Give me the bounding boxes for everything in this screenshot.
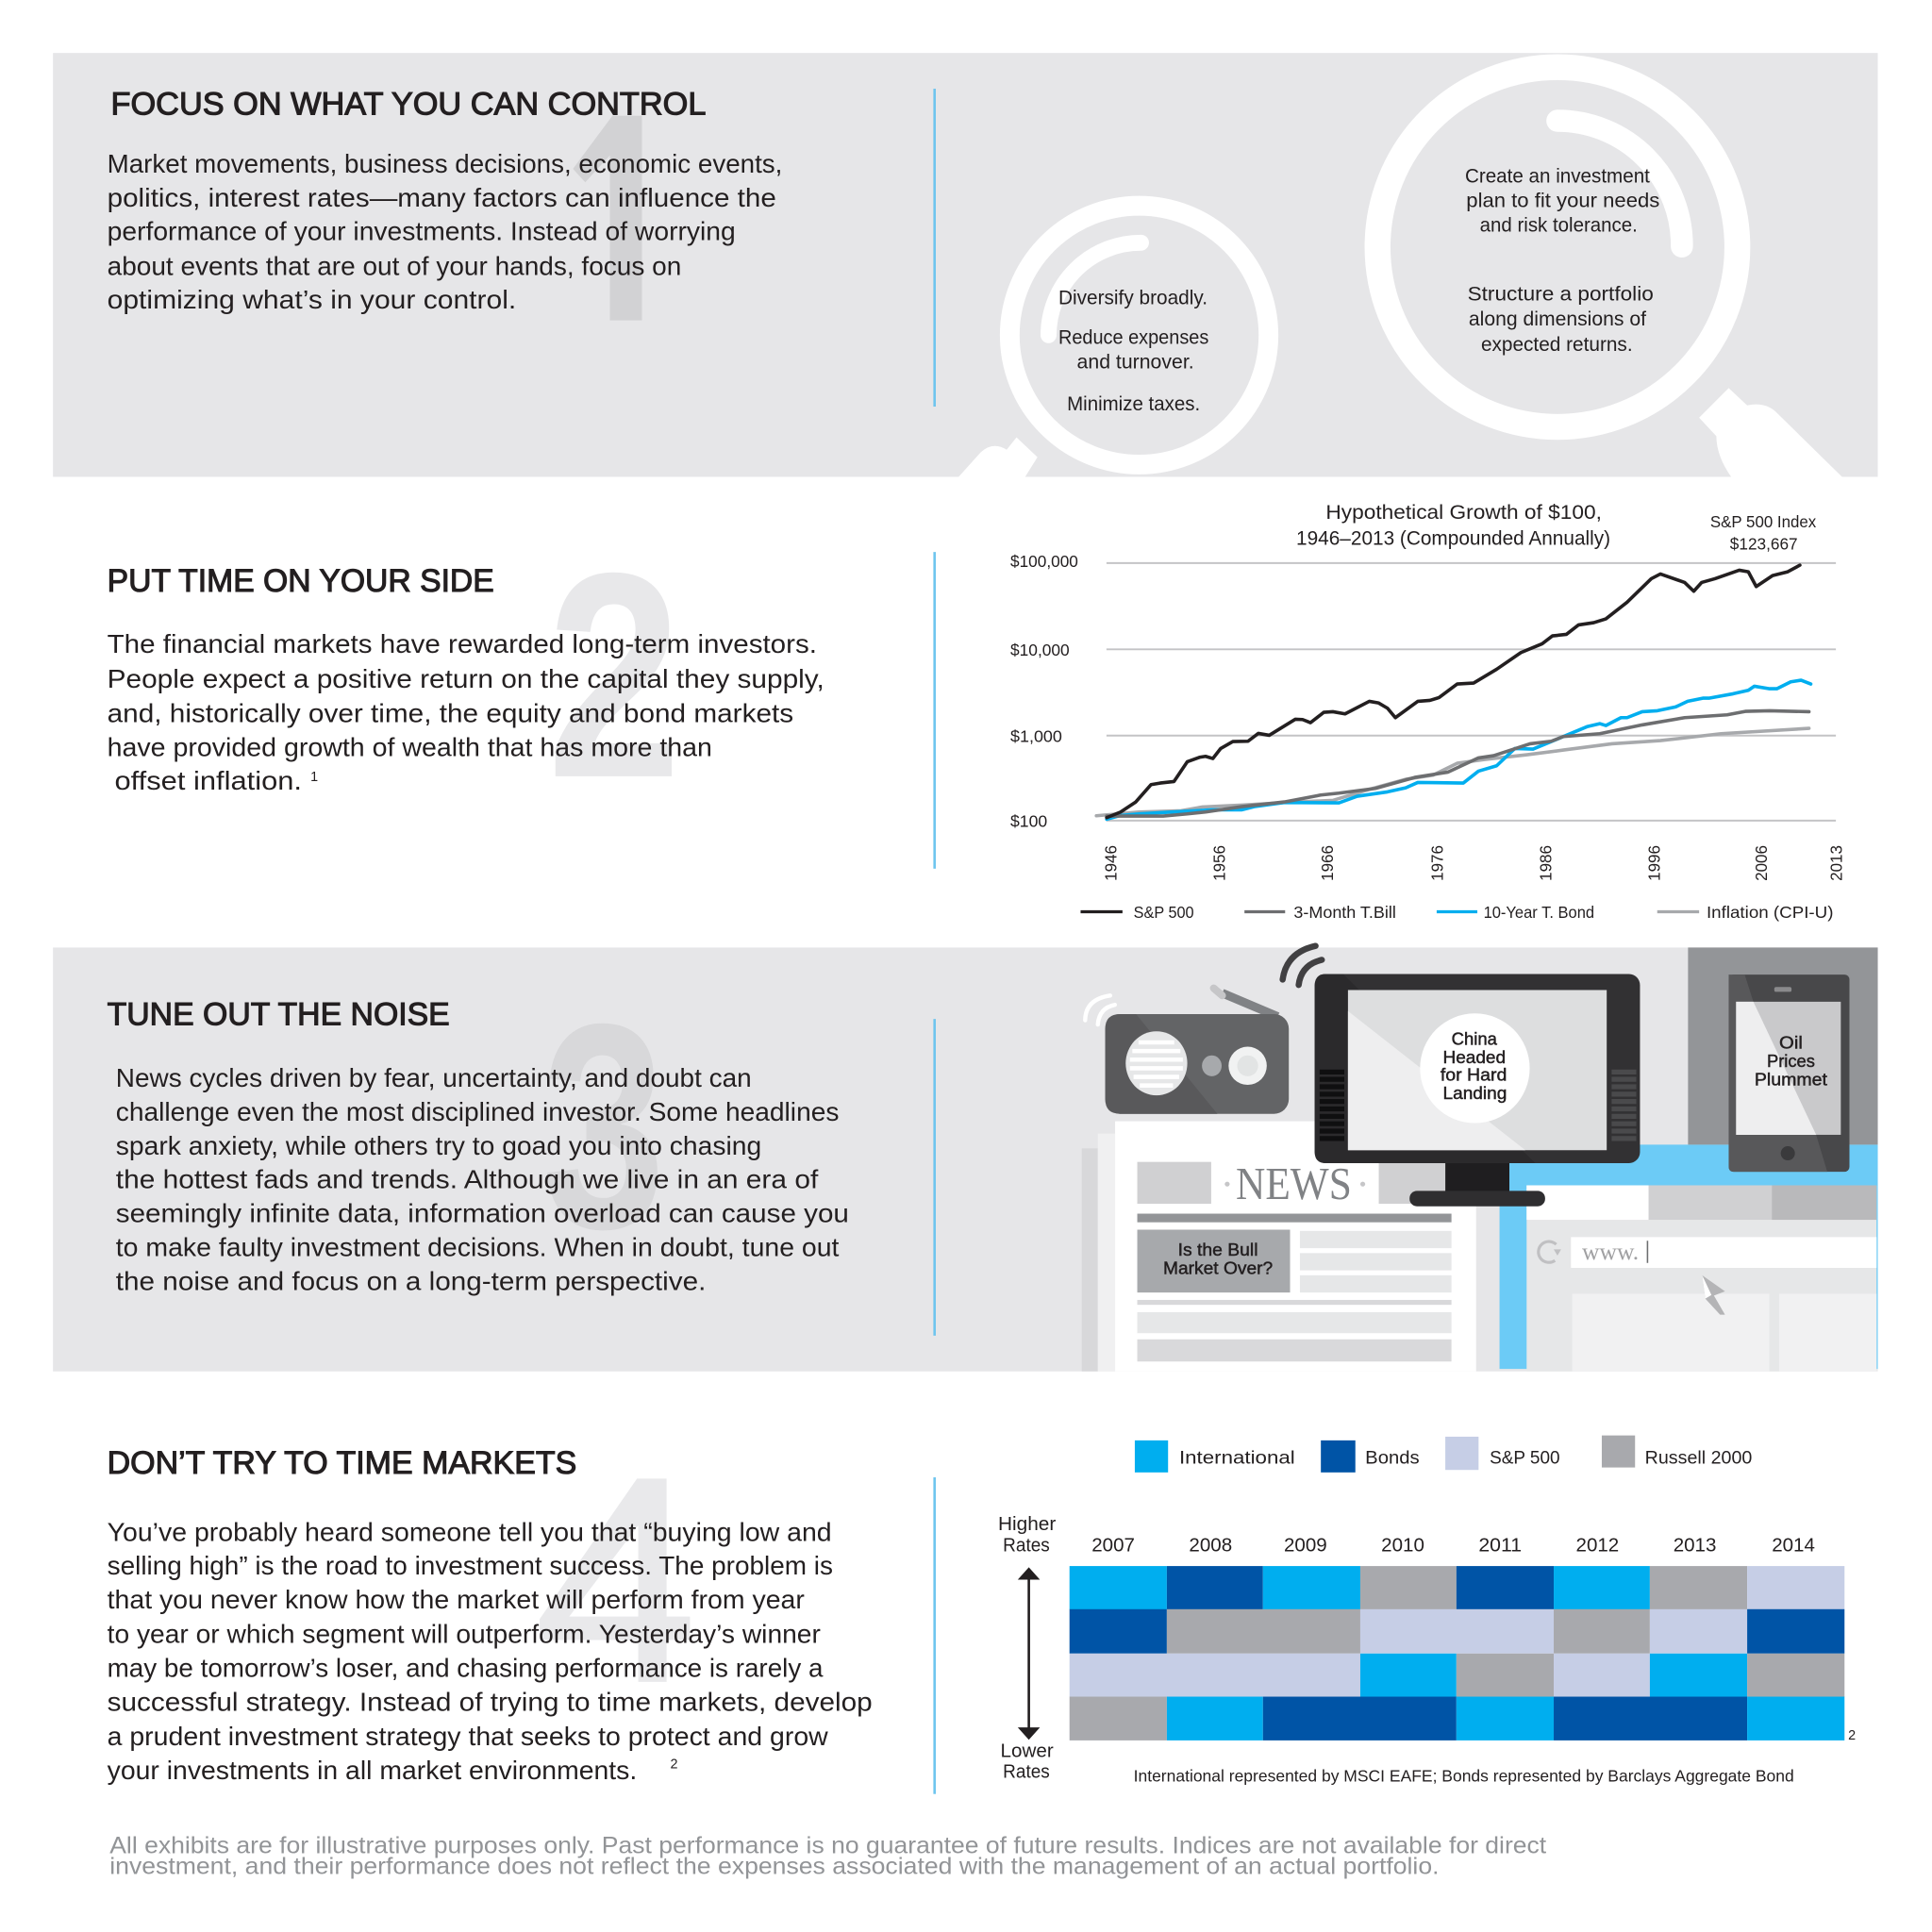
heading: PUT TIME ON YOUR SIDE <box>108 563 494 599</box>
year headers: 2010 <box>1381 1535 1424 1556</box>
body text: a prudent investment strategy that seeks to protect and grow <box>108 1722 828 1751</box>
illustration: radio <box>1085 989 1289 1114</box>
heat map legend <box>1135 1436 1752 1473</box>
text: large lens tips: plan to fit your needs <box>1466 190 1659 211</box>
body text: News cycles driven by fear, uncertainty, and doubt can <box>116 1063 752 1092</box>
axis labels and arrow: Rates <box>1003 1535 1050 1556</box>
heading: DON’T TRY TO TIME MARKETS <box>108 1445 576 1481</box>
year headers: 2008 <box>1189 1535 1232 1556</box>
body text: and, historically over time, the equity and bond markets <box>108 698 793 727</box>
body text: offset inflation. <box>114 766 302 795</box>
heat map legend: Russell 2000 <box>1645 1448 1752 1469</box>
body text: the noise and focus on a long-term perspective. <box>116 1267 706 1296</box>
body text: that you never know how the market will perform from year <box>108 1585 805 1614</box>
body text: to make faulty investment decisions. When in doubt, tune out <box>116 1233 840 1262</box>
y axis labels: $100 <box>1010 811 1047 830</box>
divider <box>933 89 936 407</box>
body text: The financial markets have rewarded long-term investors. <box>108 629 817 658</box>
body text: have provided growth of wealth that has more than <box>108 732 712 761</box>
tv headline: Landing <box>1442 1083 1507 1103</box>
chart legend: S&P 500 <box>1134 903 1194 922</box>
body text: spark anxiety, while others try to goad you into chasing <box>116 1131 761 1160</box>
icon: refresh <box>1539 1241 1561 1262</box>
body text: optimizing what’s in your control. <box>108 285 516 314</box>
divider <box>933 552 936 869</box>
numeral 4 <box>540 1478 690 1682</box>
headline box: Is the Bull <box>1178 1240 1258 1259</box>
heading: FOCUS ON WHAT YOU CAN CONTROL <box>111 86 706 122</box>
heat map legend: International <box>1179 1448 1295 1469</box>
text: large lens tips <box>1465 165 1659 356</box>
text: small lens tips: Reduce expenses <box>1058 326 1208 348</box>
body text: seemingly infinite data, information overload can cause you <box>116 1199 849 1228</box>
text: large lens tips: expected returns. <box>1481 334 1633 356</box>
axis labels and arrow: Higher <box>998 1514 1057 1535</box>
x axis year labels: 2013 <box>1827 845 1846 881</box>
illustration: newspaper <box>1082 1122 1476 1372</box>
headline box: Market Over? <box>1163 1258 1273 1278</box>
year headers <box>1091 1535 1815 1556</box>
axis labels and arrow <box>998 1514 1057 1783</box>
panel: focus on what you can control <box>53 53 1878 476</box>
heat map legend: Bonds <box>1365 1448 1420 1469</box>
x axis year labels: 1956 <box>1209 845 1228 881</box>
divider <box>933 1019 936 1336</box>
body text: People expect a positive return on the capital they supply, <box>108 664 824 693</box>
heat map cells <box>1070 1566 1844 1740</box>
text: large lens tips: along dimensions of <box>1469 308 1646 330</box>
callout: S&P 500 end value <box>1710 512 1816 554</box>
numeral 1 <box>573 116 641 321</box>
x axis year labels: 1946 <box>1101 845 1120 881</box>
year headers: 2011 <box>1478 1535 1522 1556</box>
phone headline <box>1755 1033 1827 1090</box>
body text <box>108 149 782 314</box>
tv headline <box>1420 1013 1530 1124</box>
icon: large magnifying glass <box>1377 67 1842 476</box>
panel: put time on your side <box>108 502 1846 922</box>
masthead: NEWS <box>1236 1159 1352 1209</box>
text: large lens tips: Create an investment <box>1465 165 1650 187</box>
disclaimer footer <box>109 1833 1546 1880</box>
text: small lens tips: Minimize taxes. <box>1067 393 1200 415</box>
text: large lens tips: and risk tolerance. <box>1480 215 1638 237</box>
phone headline: Prices <box>1767 1051 1815 1071</box>
y axis labels: $100,000 <box>1010 552 1078 571</box>
text: small lens tips: Diversify broadly. <box>1058 288 1208 309</box>
chart title <box>1296 502 1610 549</box>
body text: about events that are out of your hands, focus on <box>108 251 681 280</box>
body text: You’ve probably heard someone tell you that “buying low and <box>108 1517 832 1546</box>
illustration: phone <box>1688 947 1878 1172</box>
year headers: 2007 <box>1091 1535 1135 1556</box>
body text: challenge even the most disciplined investor. Some headlines <box>116 1097 839 1126</box>
y axis labels: $1,000 <box>1010 726 1062 745</box>
disclaimer footer: investment, and their performance does not reflect the expenses associated with the management of an actual portfolio. <box>109 1855 1440 1880</box>
year headers: 2014 <box>1772 1535 1815 1556</box>
divider <box>933 1477 936 1794</box>
heat map legend: S&P 500 <box>1490 1448 1560 1469</box>
body text: may be tomorrow’s loser, and chasing performance is rarely a <box>108 1654 824 1683</box>
heat map chart <box>998 1436 1856 1786</box>
footnote marker: 2 <box>1848 1728 1856 1743</box>
illustration: browser window <box>1500 1144 1878 1372</box>
y axis labels <box>1010 552 1078 830</box>
phone headline: Plummet <box>1755 1070 1827 1090</box>
callout: S&P 500 end value: S&P 500 Index <box>1710 512 1816 531</box>
x axis year labels: 2006 <box>1752 845 1771 881</box>
phone headline: Oil <box>1779 1033 1803 1053</box>
body text: selling high” is the road to investment success. The problem is <box>108 1551 833 1580</box>
body text: to year or which segment will outperform. Yesterday’s winner <box>108 1620 821 1649</box>
axis labels and arrow: Lower <box>1001 1741 1054 1762</box>
body text <box>108 629 824 795</box>
text: large lens tips: Structure a portfolio <box>1468 284 1654 306</box>
line chart: hypothetical growth of $100 <box>1010 502 1846 922</box>
icon: mouse cursor <box>1702 1275 1725 1315</box>
vents <box>1320 1072 1344 1139</box>
body text: the hottest fads and trends. Although we live in an era of <box>116 1165 818 1194</box>
panel: tune out the noise <box>53 946 1878 1372</box>
year headers: 2012 <box>1576 1535 1619 1556</box>
body text: Market movements, business decisions, economic events, <box>108 149 782 178</box>
heading: TUNE OUT THE NOISE <box>108 997 450 1033</box>
disclaimer footer: All exhibits are for illustrative purposes only. Past performance is no guarantee of future results. Indices are not available for direct <box>109 1833 1546 1858</box>
year headers: 2009 <box>1284 1535 1327 1556</box>
body text: politics, interest rates—many factors can influence the <box>108 183 776 212</box>
numeral 3: 3 <box>542 963 665 1290</box>
numeral 2: 2 <box>547 512 681 839</box>
panel: don't try to time markets <box>108 1436 1856 1794</box>
tv headline: for Hard <box>1441 1064 1507 1084</box>
body text: your investments in all market environments. <box>108 1756 637 1785</box>
chart legend: 3-Month T.Bill <box>1293 903 1396 922</box>
icon: small magnifying glass <box>958 206 1269 476</box>
chart caption: International represented by MSCI EAFE; Bonds represented by Barclays Aggregate Bond <box>1134 1767 1794 1786</box>
y axis labels: $10,000 <box>1010 641 1070 659</box>
body text: successful strategy. Instead of trying to time markets, develop <box>108 1688 873 1717</box>
text: small lens tips <box>1058 288 1208 415</box>
x axis year labels: 1996 <box>1644 845 1663 881</box>
data lines <box>1096 565 1811 819</box>
body text: 1 <box>310 770 318 785</box>
chart title: Hypothetical Growth of $100, <box>1325 502 1602 524</box>
body text: 2 <box>671 1757 678 1772</box>
chart legend: Inflation (CPI-U) <box>1707 903 1834 922</box>
body text <box>108 1517 873 1785</box>
chart title: 1946–2013 (Compounded Annually) <box>1296 527 1610 549</box>
x axis year labels: 1976 <box>1427 845 1446 881</box>
callout: S&P 500 end value: $123,667 <box>1730 535 1798 554</box>
illustration: television monitor <box>1283 946 1640 1207</box>
x axis year labels: 1966 <box>1318 845 1337 881</box>
x axis year labels: 1986 <box>1536 845 1555 881</box>
body text: performance of your investments. Instead of worrying <box>108 217 736 246</box>
year headers: 2013 <box>1674 1535 1716 1556</box>
tv headline: China <box>1452 1029 1498 1049</box>
headline box <box>1138 1230 1291 1292</box>
body text <box>116 1063 849 1296</box>
axis labels and arrow: Rates <box>1003 1762 1050 1783</box>
tv headline: Headed <box>1442 1047 1506 1067</box>
text: small lens tips: and turnover. <box>1077 352 1194 374</box>
chart legend: 10-Year T. Bond <box>1484 903 1594 922</box>
address bar text: www. <box>1582 1240 1639 1265</box>
chart legend <box>1080 903 1834 922</box>
x axis year labels <box>1101 845 1846 881</box>
